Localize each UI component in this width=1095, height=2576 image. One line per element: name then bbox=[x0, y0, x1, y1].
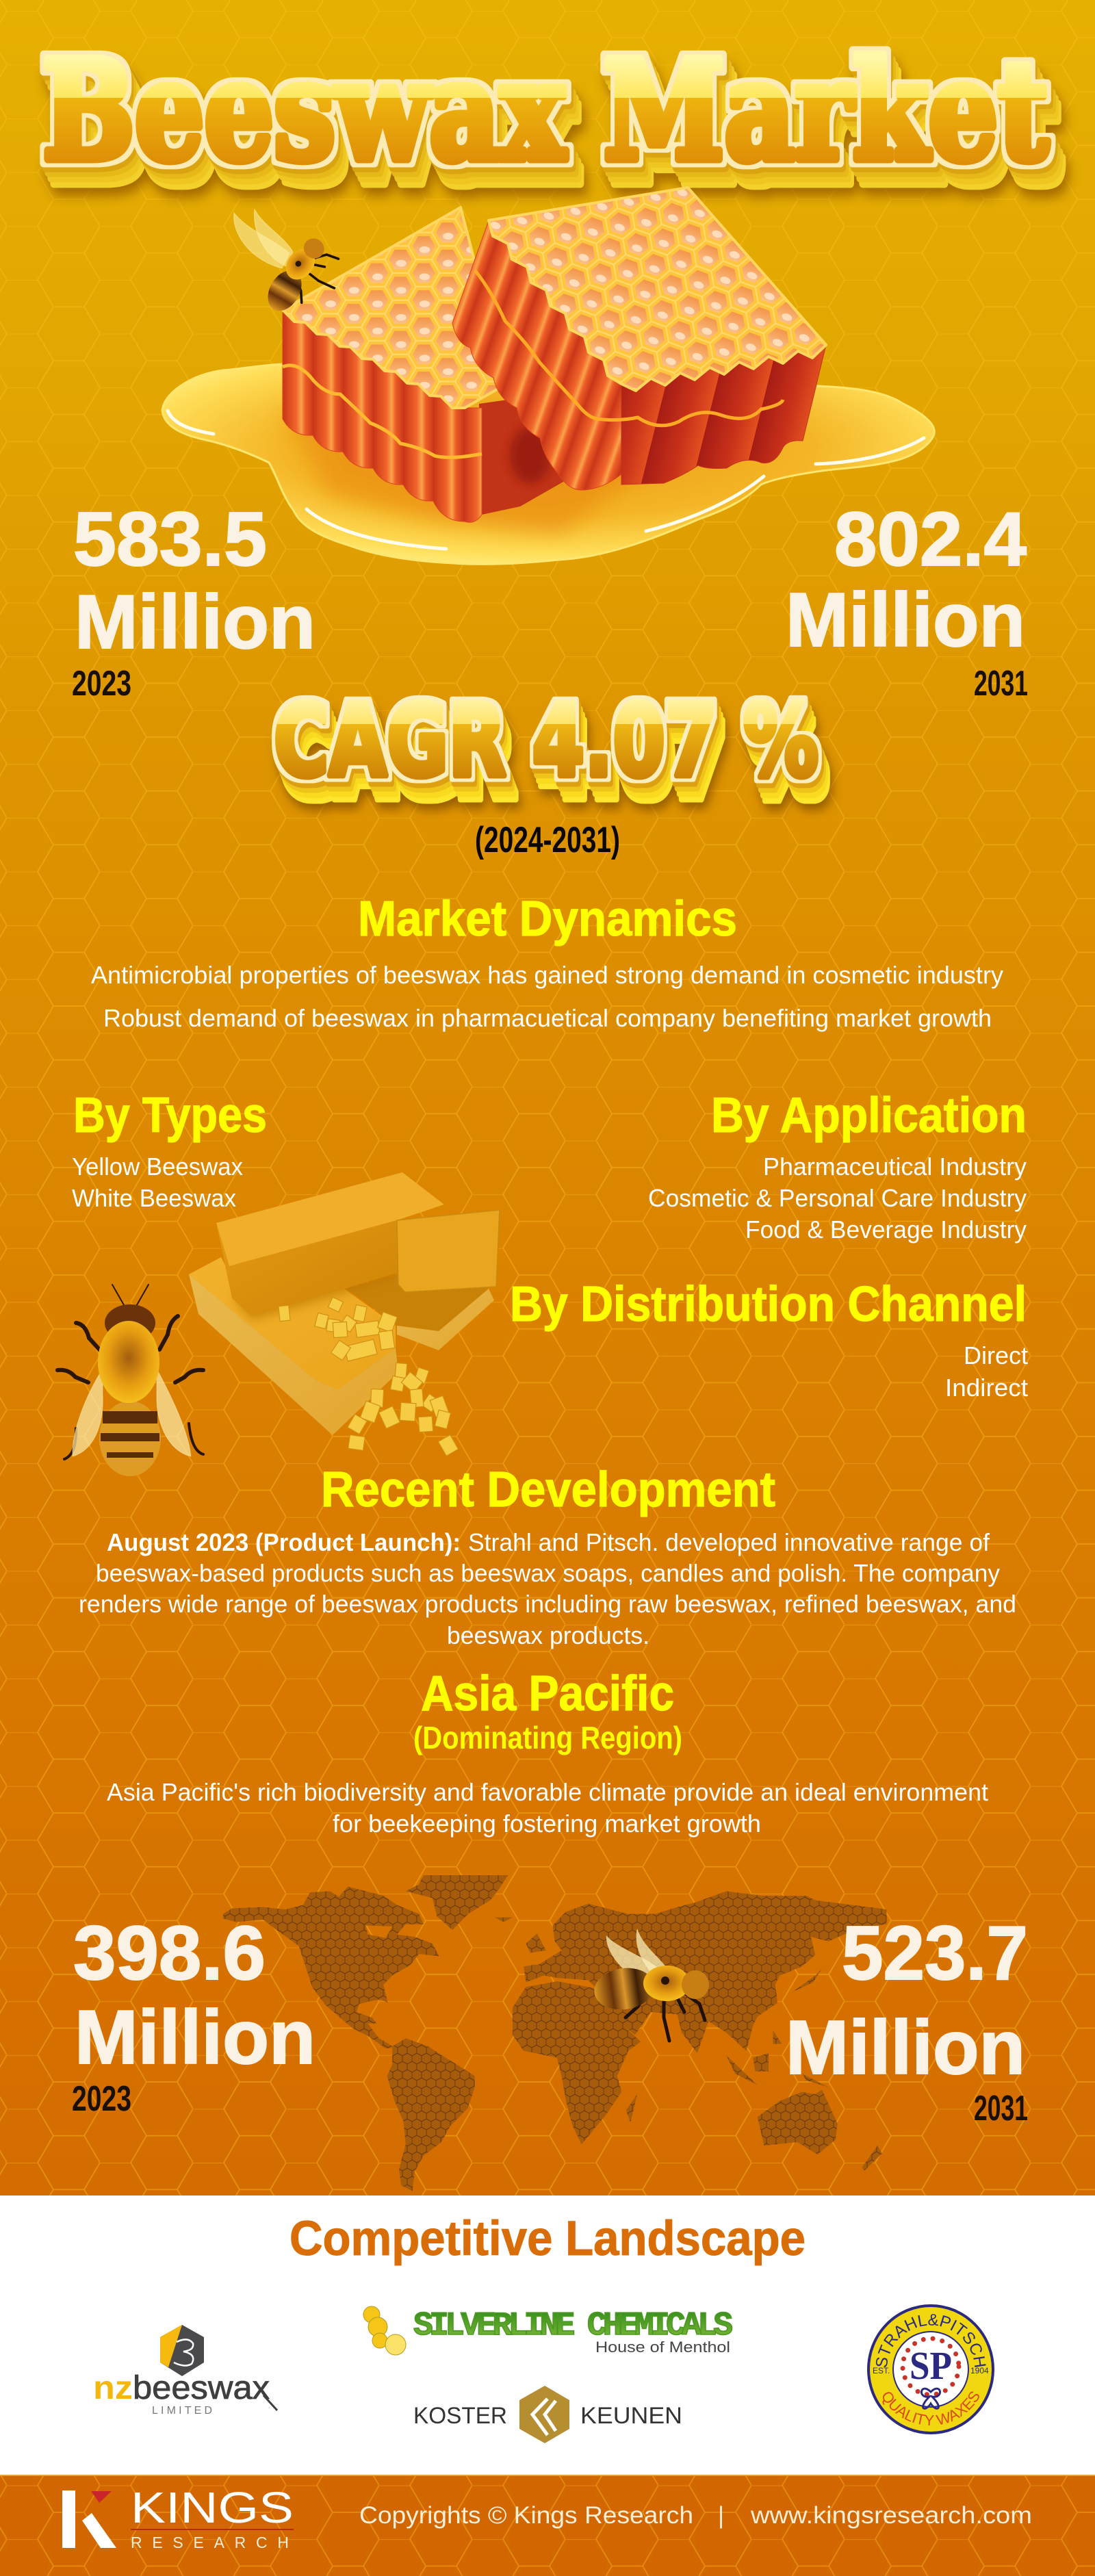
logo: koster keunen: KOSTER bbox=[413, 2403, 507, 2429]
bee abdomen bbox=[99, 1401, 161, 1476]
logo: kings research: KINGS bbox=[131, 2483, 294, 2532]
right cube bbox=[397, 1210, 500, 1292]
logo: silverline chemicals bbox=[363, 2306, 733, 2356]
section: market dynamics: Market Dynamics bbox=[358, 892, 737, 946]
separator: | bbox=[718, 2502, 724, 2529]
stat: market size 2023: Million bbox=[75, 580, 315, 665]
puddle highlights bbox=[168, 411, 924, 549]
section: by distribution channel: Indirect bbox=[945, 1374, 1028, 1402]
section: market dynamics: Robust demand of beeswax in pharmacuetical company benefiting market growth bbox=[103, 1004, 992, 1032]
puddle shadow bbox=[283, 411, 684, 534]
upper bar bbox=[216, 1172, 444, 1266]
logo: strahl and pitsch: QUALITY WAXES bbox=[883, 2391, 979, 2425]
section: by distribution channel bbox=[510, 1277, 1028, 1402]
CAGR period: (2024-2031) bbox=[475, 820, 620, 860]
lower left bar top bbox=[189, 1257, 396, 1389]
left comb top bbox=[283, 207, 506, 408]
stat: asia pacific 2023: 398.6 bbox=[73, 1911, 266, 1996]
section: by application: Pharmaceutical Industry bbox=[763, 1152, 1027, 1181]
section: recent development: Strahl and Pitsch. developed innovative range of bbox=[468, 1528, 990, 1556]
lower left bar front bbox=[189, 1274, 398, 1435]
bee head bbox=[105, 1304, 155, 1341]
section: recent development: Recent Development bbox=[321, 1463, 775, 1517]
section: by application bbox=[648, 1088, 1027, 1244]
left comb side bbox=[283, 310, 482, 522]
section: asia pacific: Asia Pacific bbox=[421, 1666, 674, 1721]
icon: bee on world map bbox=[591, 1929, 709, 2041]
logo: koster keunen: KEUNEN bbox=[580, 2403, 682, 2429]
section: recent development: August 2023 (Product Launch): bbox=[107, 1528, 461, 1556]
stat: market size 2031: 2031 bbox=[974, 664, 1028, 704]
stat: asia pacific 2023: Million bbox=[75, 1995, 315, 2080]
section: by distribution channel: Direct bbox=[964, 1341, 1028, 1369]
icon: bee on honeycomb bbox=[234, 209, 352, 333]
CAGR headline: CAGR 4.07 % bbox=[274, 684, 819, 799]
logo: nz beeswax: beeswax bbox=[133, 2370, 270, 2406]
bee wings bbox=[73, 1369, 103, 1456]
panel: competitive landscape bbox=[0, 2195, 1095, 2475]
logo: koster keunen bbox=[413, 2386, 682, 2443]
section: market dynamics: Antimicrobial properties of beeswax has gained strong demand in cosmetic industry bbox=[91, 961, 1003, 989]
stat: asia pacific 2031: 2031 bbox=[974, 2089, 1028, 2128]
logo: nz beeswax bbox=[93, 2325, 277, 2417]
section: asia pacific: (Dominating Region) bbox=[413, 1720, 682, 1755]
logo: nz beeswax: LIMITED bbox=[152, 2405, 212, 2417]
logo: strahl and pitsch: 1904 bbox=[970, 2366, 989, 2375]
section: by types: White Beeswax bbox=[72, 1184, 236, 1212]
stat: market size 2031: Million bbox=[786, 578, 1025, 662]
icon: bee top view bbox=[57, 1285, 203, 1476]
logo: strahl and pitsch: STRAHL&PITSCH bbox=[876, 2314, 986, 2368]
section: recent development: beeswax-based products such as beeswax soaps, candles and polish. The company bbox=[96, 1559, 1000, 1587]
lower right bar bbox=[347, 1275, 489, 1331]
gap shading bbox=[510, 426, 551, 484]
website: www.kingsresearch.com bbox=[750, 2502, 1032, 2529]
small wax cubes bbox=[279, 1297, 459, 1456]
logo: strahl and pitsch bbox=[867, 2304, 994, 2434]
section: recent development: beeswax products. bbox=[447, 1621, 649, 1649]
logo: strahl and pitsch: EST. bbox=[873, 2366, 890, 2375]
world map bbox=[205, 1875, 903, 2195]
section: by distribution channel: By Distribution Channel bbox=[510, 1277, 1027, 1332]
right comb band bbox=[475, 270, 783, 426]
footer bbox=[0, 2475, 1095, 2576]
stat: asia pacific 2031 bbox=[786, 1911, 1028, 2128]
section: market dynamics bbox=[91, 892, 1003, 1032]
illustration: beeswax blocks bbox=[189, 1172, 500, 1456]
section: recent development bbox=[79, 1463, 1016, 1649]
stat: market size 2023: 2023 bbox=[72, 664, 131, 704]
logo: kings research bbox=[62, 2483, 294, 2551]
section: recent development: renders wide range of beeswax products including raw beeswax, refined beeswax, and bbox=[79, 1590, 1016, 1618]
logo: silverline chemicals: House of Menthol bbox=[595, 2339, 730, 2356]
logo: silverline chemicals: SILVERLINE CHEMICALS bbox=[413, 2308, 733, 2345]
right comb left face bbox=[452, 220, 622, 490]
logo: nz beeswax: nz bbox=[93, 2370, 133, 2406]
right comb top bbox=[489, 188, 826, 391]
section: by application: By Application bbox=[711, 1088, 1027, 1143]
logo: kings research: RESEARCH bbox=[131, 2534, 289, 2551]
stat: asia pacific 2031: 523.7 bbox=[842, 1911, 1028, 1996]
bee thorax bbox=[98, 1321, 159, 1403]
stat: asia pacific 2031: Million bbox=[786, 2005, 1025, 2090]
section: by types: By Types bbox=[73, 1088, 267, 1143]
section: by types bbox=[72, 1088, 267, 1212]
section: by types: Yellow Beeswax bbox=[72, 1152, 243, 1181]
bee antennae and legs bbox=[57, 1285, 203, 1459]
stat: market size 2031 bbox=[786, 497, 1028, 704]
left comb band bbox=[283, 365, 482, 457]
section: asia pacific bbox=[107, 1666, 988, 1838]
section: asia pacific: Asia Pacific's rich biodiversity and favorable climate provide an ideal environment bbox=[107, 1778, 988, 1806]
stat: market size 2023: 583.5 bbox=[73, 497, 267, 582]
gap between blocks bbox=[479, 397, 568, 515]
heading: Competitive Landscape bbox=[289, 2212, 806, 2266]
right comb right face bbox=[621, 345, 826, 485]
stat: market size 2023 bbox=[72, 497, 315, 704]
stat: asia pacific 2023 bbox=[72, 1911, 315, 2119]
section: by application: Cosmetic & Personal Care Industry bbox=[648, 1184, 1027, 1212]
copyright: Copyrights © Kings Research bbox=[359, 2502, 693, 2529]
section: by application: Food & Beverage Industry bbox=[745, 1215, 1027, 1244]
stat: asia pacific 2023: 2023 bbox=[72, 2079, 131, 2119]
logo: strahl and pitsch: SP bbox=[910, 2343, 952, 2388]
shadow under upper bar bbox=[232, 1266, 397, 1321]
section: asia pacific: for beekeeping fostering market growth bbox=[333, 1809, 761, 1838]
stat: market size 2031: 802.4 bbox=[834, 497, 1027, 582]
honey puddle bbox=[162, 364, 934, 564]
illustration: honeycomb on honey puddle bbox=[162, 188, 934, 564]
